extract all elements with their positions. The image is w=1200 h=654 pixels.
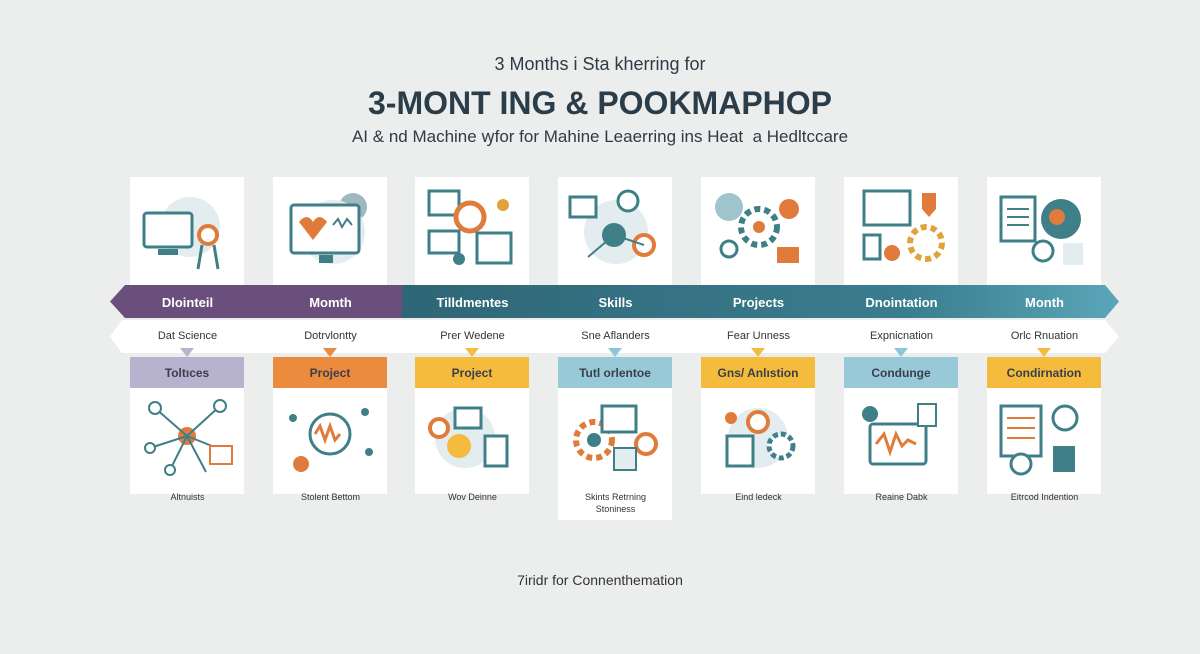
bottom captions: Wov Deinne bbox=[448, 492, 497, 502]
main timeline band: Prer Wedene bbox=[440, 330, 505, 342]
title top line: 3 Months i Sta kherring for bbox=[494, 54, 706, 74]
main timeline band: Month bbox=[1025, 295, 1064, 310]
main timeline band: Dnointation bbox=[865, 295, 938, 310]
main timeline band: Dotrvlontty bbox=[304, 330, 357, 342]
bottom captions: Reaine Dabk bbox=[875, 492, 928, 502]
bottom captions: Eitrcod Indention bbox=[1011, 492, 1078, 502]
bottom captions: Stolent Bettom bbox=[301, 492, 360, 502]
subtitle: AI & nd Machine ꝡfor for Mahine Leaerring ins Heat a Hedltccare bbox=[352, 127, 848, 146]
phase labels: Gns/ Anlıstion bbox=[718, 366, 798, 380]
phase labels: Project bbox=[452, 366, 492, 380]
main timeline band: Momth bbox=[309, 295, 352, 310]
phase labels: Tutl orlentoe bbox=[579, 366, 651, 380]
main timeline band: Dlointeil bbox=[162, 295, 213, 310]
bottom captions: Altnuists bbox=[170, 492, 204, 502]
main title: 3-MONT ING & POOKMAPHOP bbox=[368, 85, 832, 121]
main timeline band: Projects bbox=[733, 295, 784, 310]
phase labels: Project bbox=[310, 366, 350, 380]
main timeline band: Tilldmentes bbox=[436, 295, 508, 310]
main timeline band: Sne Aflanders bbox=[581, 330, 650, 342]
main timeline band: Expnicnation bbox=[870, 330, 933, 342]
main timeline band: Skills bbox=[599, 295, 632, 310]
footer text: 7iridr for Connenthemation bbox=[517, 572, 683, 588]
phase labels: Condirnation bbox=[1007, 366, 1081, 380]
main timeline band: Fear Unness bbox=[727, 330, 790, 342]
bottom captions: Eind ledeck bbox=[735, 492, 782, 502]
phase labels bbox=[130, 357, 1101, 388]
bottom captions: Stoniness bbox=[596, 504, 635, 514]
main timeline band: Dat Science bbox=[158, 330, 217, 342]
phase labels: Condunge bbox=[871, 366, 931, 380]
phase labels: Toltıces bbox=[165, 366, 209, 380]
bottom captions: Skints Retrning bbox=[585, 492, 646, 502]
main timeline band: Orlc Rnuation bbox=[1011, 330, 1078, 342]
